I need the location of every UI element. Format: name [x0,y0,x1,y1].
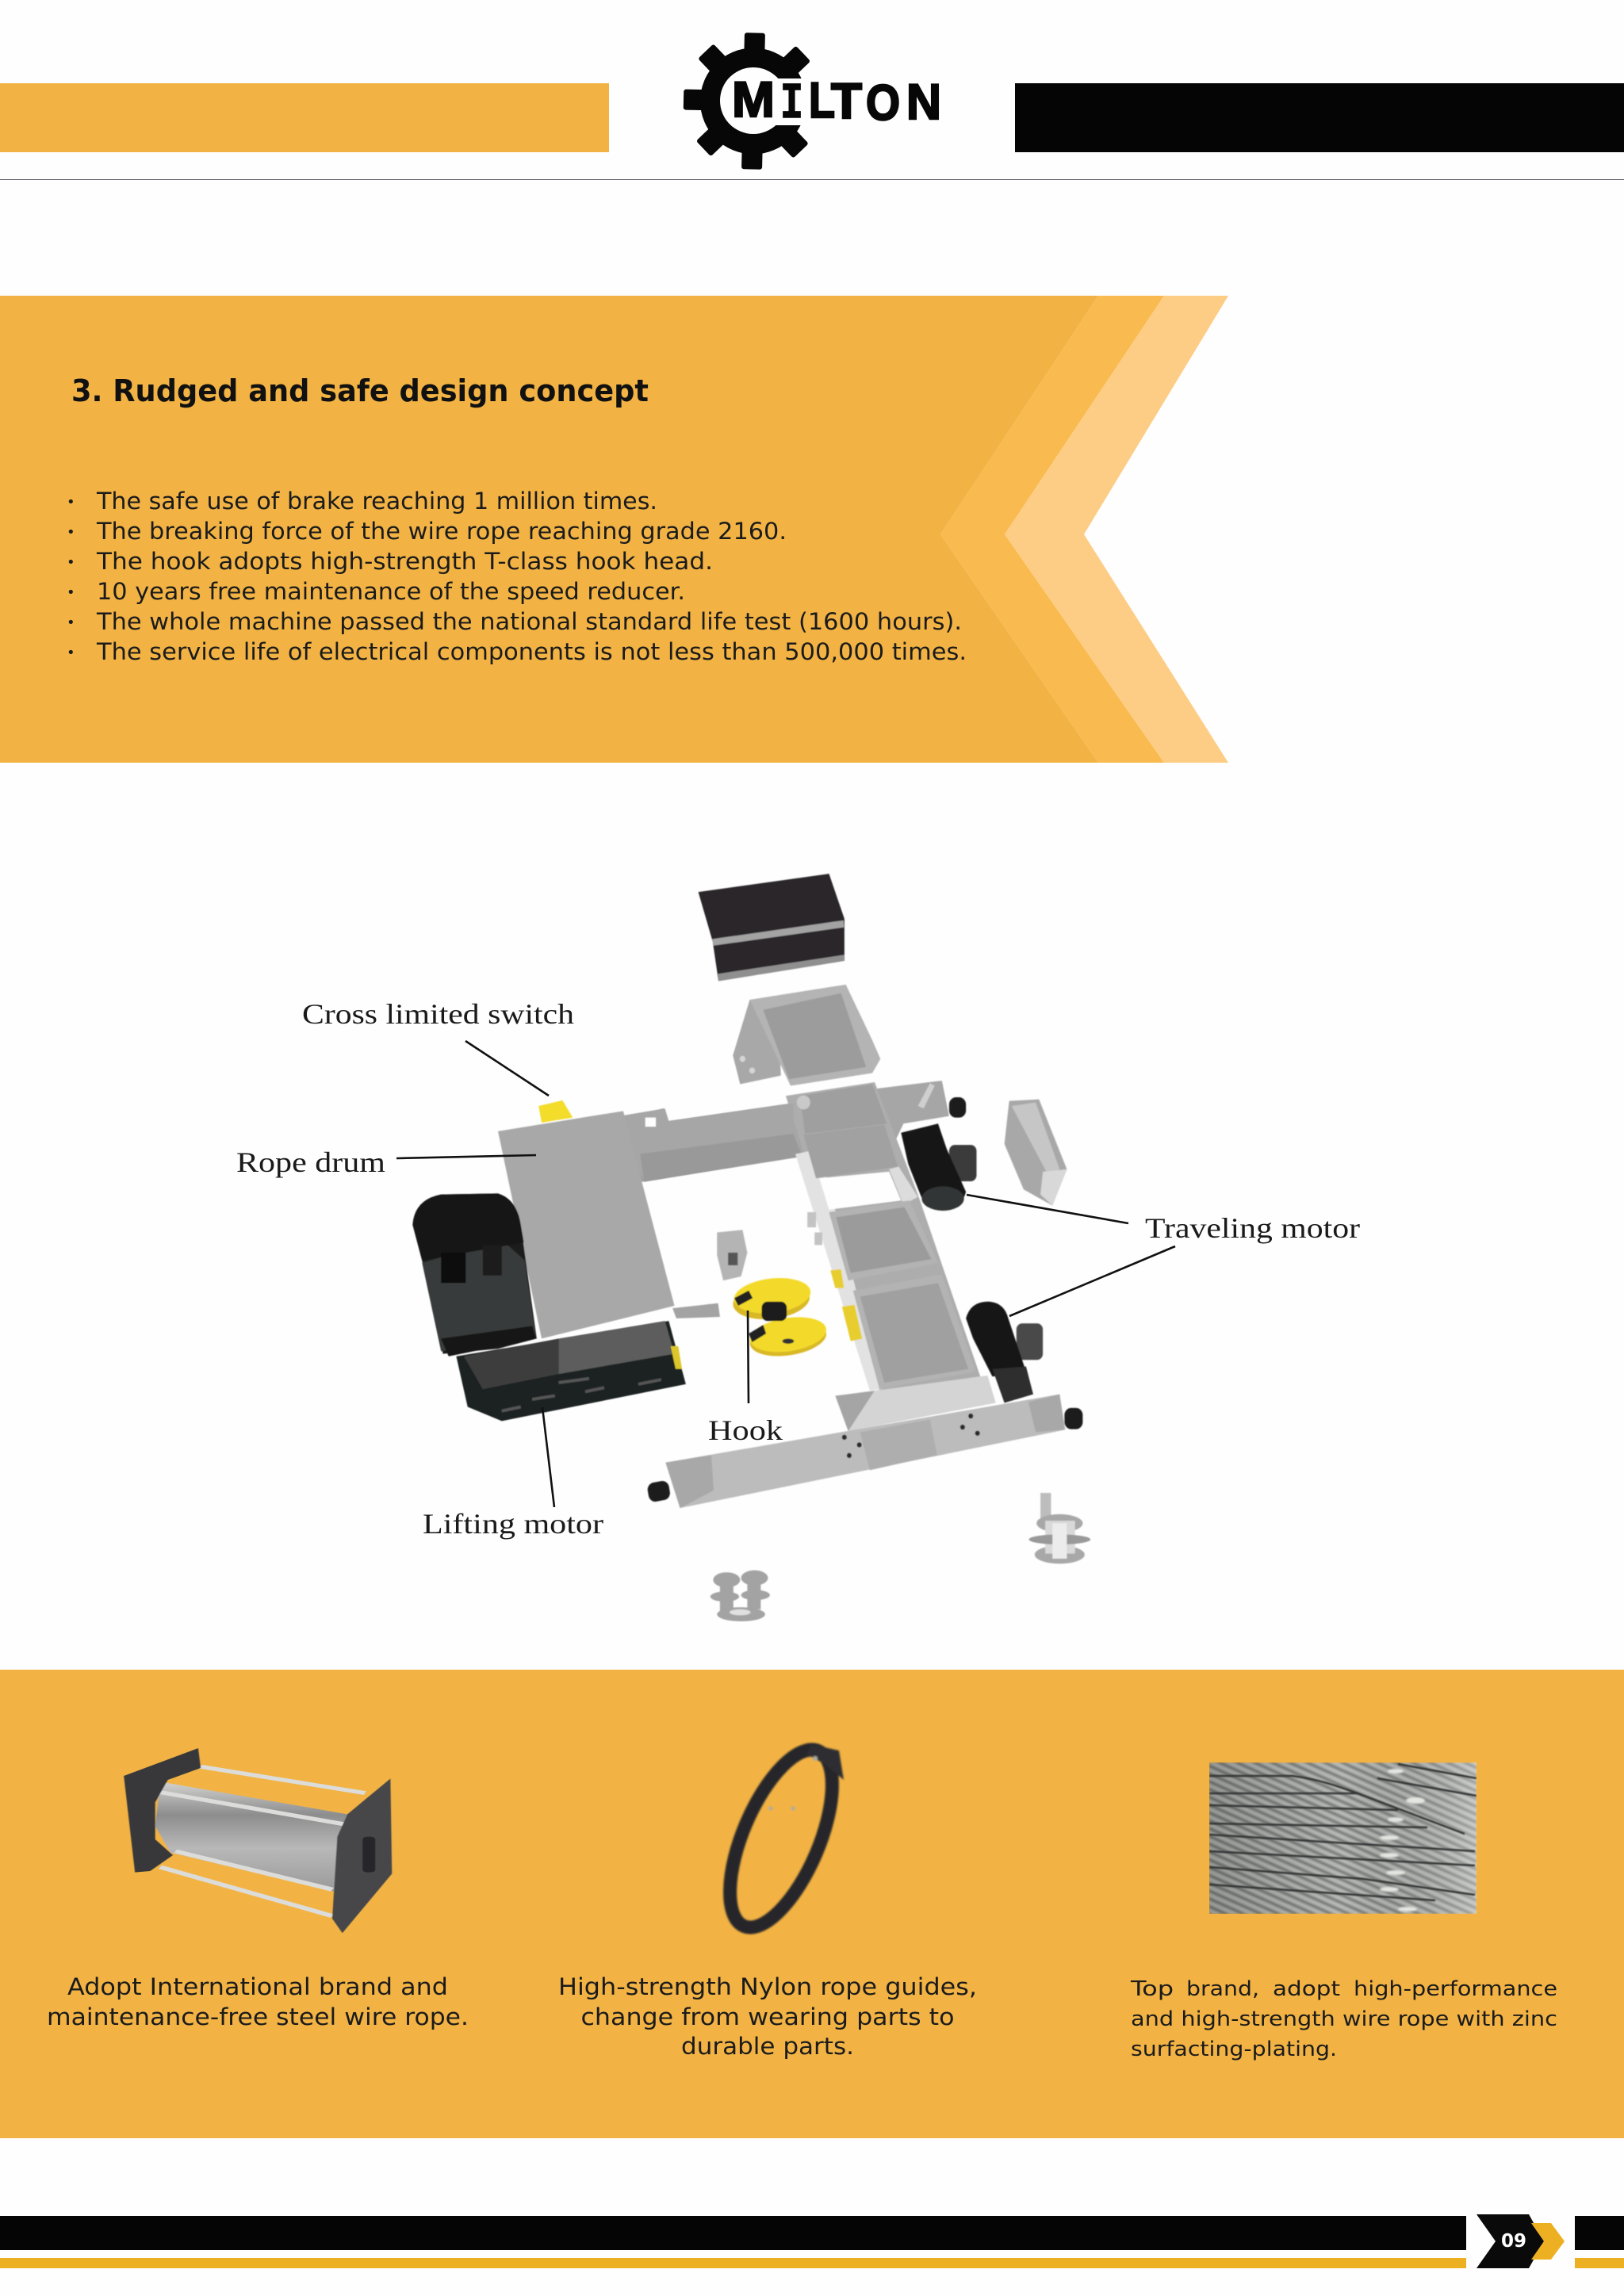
footer [0,2214,1624,2268]
caption: wire rope with zinc plating: and high-strength wire rope with zinc [1131,2007,1557,2031]
logo: Milton gear [684,33,941,170]
bullet list: • [67,584,75,601]
leader lines [396,1041,1175,1507]
bullet list [67,488,967,665]
header orange bar [0,83,609,152]
label: cross limited switch: Cross limited switch [302,998,574,1030]
logo: Milton gear: O [866,75,900,131]
logo: Milton gear: I [780,76,803,133]
caption: nylon rope guides [558,1973,977,2060]
central frame spine [786,1082,980,1391]
page number badge [1477,2214,1565,2268]
caption: wire rope with zinc plating: brand, [1186,1977,1259,2001]
exploded hoist diagram [236,874,1360,1621]
icon: side bracket [1005,1100,1067,1206]
panel base [0,296,1098,763]
page number badge: 09 [1501,2231,1526,2252]
bullet list: • [67,614,75,631]
bullet list: The service life of electrical components is not less than 500,000 times. [96,638,967,665]
header black bar [1015,83,1624,152]
footer gold bar left [0,2258,1466,2268]
bullet list: • [67,524,75,541]
bullet list: 10 years free maintenance of the speed reducer. [97,578,685,605]
caption: wire rope with zinc plating: Top [1130,1977,1174,2001]
caption: nylon rope guides: durable parts. [681,2033,854,2060]
upper frame box [733,985,880,1085]
caption: nylon rope guides: change from wearing parts to [580,2003,955,2030]
image: wire rope drum [124,1748,392,1933]
chevron mid [940,296,1164,763]
caption: wire rope with zinc plating: high-performance [1354,1977,1557,2001]
caption: wire rope with zinc plating [1130,1977,1557,2061]
bullet list: • [67,645,75,661]
label: lifting motor: Lifting motor [423,1508,603,1540]
diagram parts right [634,874,1090,1621]
label: traveling motor: Traveling motor [1145,1212,1360,1244]
bullet list: • [67,494,75,511]
bullet list: The safe use of brake reaching 1 million times. [96,488,657,515]
label: hook: Hook [708,1414,783,1446]
icon: traveling motor 1 [901,1097,976,1211]
footer black bar right [1575,2216,1624,2250]
panel: design concept [0,296,1228,763]
label: rope drum: Rope drum [236,1146,385,1178]
diagram parts left [412,1100,793,1421]
icon: gearbox [456,1321,686,1421]
icon: black cover box [699,874,845,981]
bullet list: The hook adopts high-strength T-class hook head. [96,548,713,575]
cross beam [634,1081,949,1182]
beam stub [619,1104,793,1182]
caption: wire rope with zinc plating: adopt [1273,1977,1340,2001]
rope drum cover [498,1111,675,1338]
image: steel wire rope [1209,1762,1477,1914]
heading: 3. Rudged and safe design concept [71,373,649,408]
bullet list: The whole machine passed the national standard life test (1600 hours). [96,608,962,635]
caption: steel wire rope [47,1973,469,2030]
icon: traveling motor 2 [966,1302,1043,1402]
caption: nylon rope guides: High-strength Nylon rope guides, [558,1973,977,2000]
image: nylon rope guide ring [709,1736,853,1941]
icon: small guide block [717,1230,747,1280]
footer gold bar right [1575,2258,1624,2268]
icon: wheel rear [710,1571,770,1621]
chevron light [1005,296,1228,763]
footer black bar left [0,2216,1466,2250]
logo: Milton gear: M [732,72,775,128]
header [0,33,1624,180]
logo: Milton gear: L [809,73,835,128]
icon: wheel front [1029,1493,1090,1563]
bullet list: The breaking force of the wire rope reaching grade 2160. [96,518,787,545]
caption: steel wire rope: maintenance-free steel wire rope. [47,2003,469,2030]
yellow brackets [830,1269,862,1341]
icon: cross limit switch [538,1100,573,1123]
icon: lifting motor [412,1193,537,1357]
logo: Milton gear: N [906,75,941,130]
icon: hook sheaves [731,1274,829,1360]
lower beam [646,1395,1082,1508]
panel: components [0,1670,1624,2138]
caption: steel wire rope: Adopt International brand and [67,1973,448,2000]
logo: Milton gear: T [831,74,862,129]
caption: wire rope with zinc plating: surfacting-plating. [1131,2038,1337,2061]
panel background [0,1670,1624,2138]
lower gusset [835,1376,996,1431]
bullet list: • [67,554,75,571]
